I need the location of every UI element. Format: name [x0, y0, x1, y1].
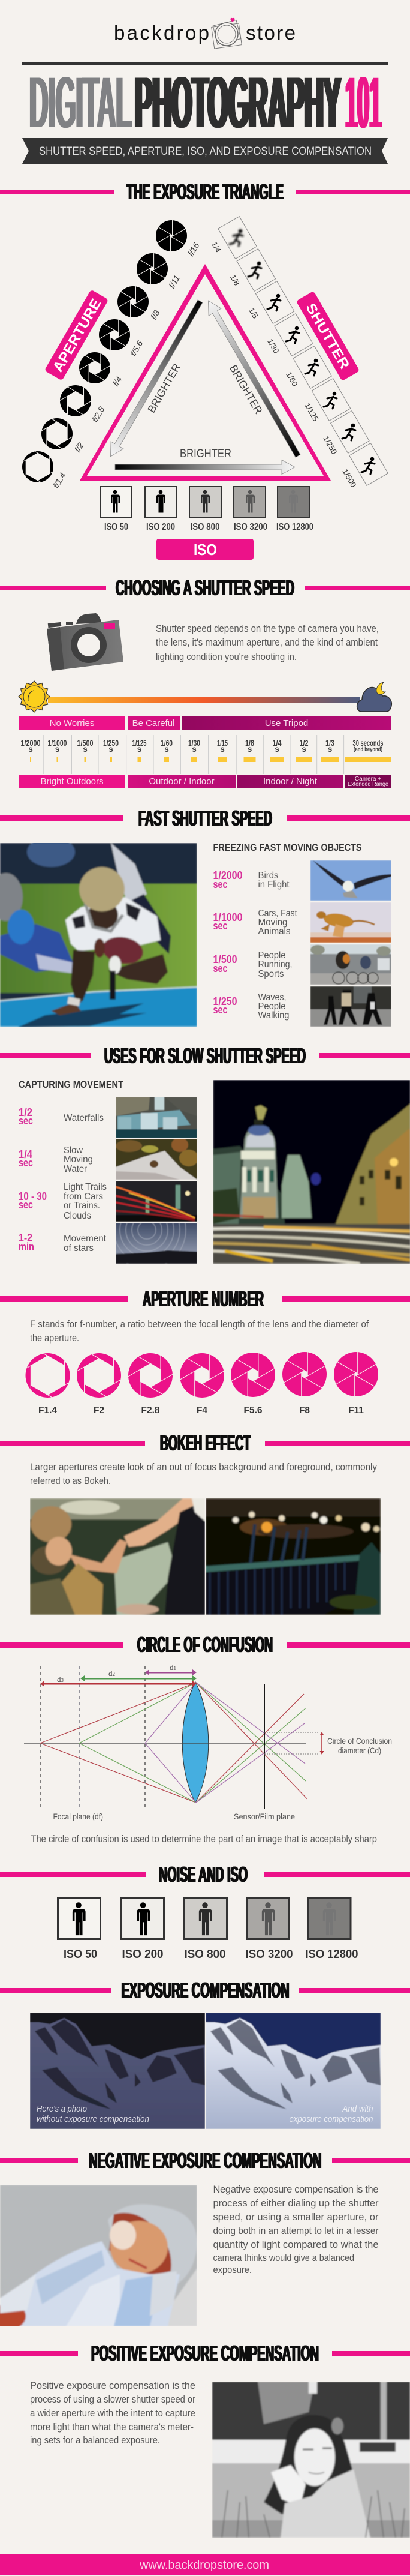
logo word: backdrop: backdrop [114, 22, 209, 44]
row: 1/2000 birds: sec [213, 878, 228, 890]
text: negative exposure compensation: Negative exposure compensation is the [213, 2184, 379, 2195]
aperture value labels: f/1.4 [51, 471, 68, 490]
exposure duration bars [30, 757, 391, 762]
large iso labels: ISO 200 [122, 1948, 163, 1961]
capturing movement panel [19, 1079, 198, 1269]
triangle outline [80, 264, 331, 481]
band: use tripod: Use Tripod [265, 718, 308, 728]
heading: noise and iso: NOISE AND ISO [159, 1862, 248, 1887]
text: shutter speed intro [156, 623, 379, 662]
text: negative exposure compensation: quantity of light compared to what the [213, 2239, 379, 2250]
large iso labels [64, 1948, 358, 1961]
row: waterfalls: Waterfalls [64, 1113, 104, 1123]
text: f-number definition [30, 1319, 369, 1344]
icon: moon and cloud [357, 682, 391, 712]
f-number labels: F5.6 [243, 1405, 263, 1416]
sensor plane [264, 1684, 265, 1809]
shutter value labels: 1/250 [321, 434, 339, 456]
pill: shutter [296, 291, 360, 381]
row: 1/2000 birds: 1/2000 [213, 869, 242, 881]
shutter value labels: 1/5 [247, 306, 260, 320]
shutter speed values: s [55, 745, 59, 754]
text: shutter speed intro: lighting condition you're shooting in. [156, 651, 297, 662]
photo: child holding hand [30, 1498, 205, 1615]
row: light trails: from Cars [64, 1192, 103, 1202]
iso scale [100, 487, 313, 560]
arrow: d2 [80, 1675, 197, 1681]
shutter speed values: 1/60 [161, 739, 173, 748]
arrow: aperture brighter [104, 298, 206, 460]
text: bokeh definition: referred to as Bokeh. [30, 1476, 111, 1486]
shutter speed values: s [248, 745, 252, 754]
shutter speed values: s [164, 745, 169, 754]
photo: city night street with light trails [213, 1080, 410, 1264]
icon: aperture F5.6 [231, 1353, 275, 1397]
shutter value labels: 1/8 [228, 273, 242, 287]
row: movement of stars: min [19, 1241, 34, 1253]
row: 1/1000 cars animals: Cars, Fast [258, 908, 297, 919]
caption: with compensation: exposure compensation [289, 2114, 373, 2124]
photo: star trails [116, 1223, 197, 1264]
aperture scale [22, 220, 201, 490]
row: 1/1000 cars animals: Moving [258, 917, 288, 928]
arrow: shutter brighter [202, 297, 304, 460]
row: 1/250 waves walking: Walking [258, 1010, 289, 1021]
aperture value labels: f/2.8 [90, 405, 107, 424]
shutter speed values: s [220, 745, 225, 754]
heading: aperture number: APERTURE NUMBER [143, 1286, 264, 1311]
row: 1/500 people running [213, 950, 293, 979]
row: movement of stars [19, 1232, 107, 1253]
row: 1/500 people running: People [258, 950, 286, 961]
shutter speed values: s [275, 745, 279, 754]
optical axis [24, 1743, 306, 1744]
shutter speed values: 1/2000 [20, 739, 41, 748]
label: circle of conclusion diameter: Circle of Conclusion [327, 1736, 392, 1746]
heading: noise and iso [0, 1862, 410, 1887]
arrow: d3 [40, 1681, 197, 1687]
aperture value labels: f/16 [186, 241, 201, 258]
band: outdoor indoor: Outdoor / Indoor [149, 776, 215, 787]
shutter speed values: s [137, 745, 141, 754]
subheading: FREEZING FAST MOVING OBJECTS [213, 842, 362, 853]
heading: fast shutter speed [0, 806, 410, 830]
photo: cheetah [310, 902, 391, 943]
heading: aperture number [0, 1286, 410, 1311]
large iso labels: ISO 12800 [306, 1948, 358, 1961]
subtitle ribbon [22, 138, 388, 164]
text: f-number definition: F stands for f-number, a ratio between the focal length of the lens and the diameter of [30, 1319, 369, 1330]
heading: the exposure triangle [0, 179, 410, 204]
aperture number scale [25, 1352, 378, 1416]
pill: aperture [44, 289, 108, 381]
aperture value labels: f/8 [149, 308, 162, 321]
row: 1/1000 cars animals: Animals [258, 926, 290, 937]
label: brighter bottom: BRIGHTER [180, 448, 231, 460]
row: 1/2000 birds: Birds [258, 871, 278, 881]
shutter speed values: 1/250 [103, 739, 119, 748]
icon: aperture f/1.4 [22, 451, 53, 482]
footer [0, 2554, 410, 2575]
icon: aperture f/11 [137, 253, 168, 284]
red rays [40, 1683, 307, 1803]
shutter value labels: 1/60 [284, 370, 300, 388]
heading: fast shutter speed: FAST SHUTTER SPEED [138, 806, 272, 830]
band: no worries [19, 716, 125, 730]
heading: bokeh effect [0, 1431, 410, 1455]
label: brighter right: BRIGHTER [227, 363, 265, 416]
label: focal plane: Focal plane (df) [53, 1812, 103, 1821]
text: positive exposure compensation: ing sets for a balanced exposure. [30, 2435, 160, 2446]
row: waterfalls: sec [19, 1115, 33, 1127]
f-number labels: F2 [94, 1405, 104, 1416]
band: camera extended range [345, 775, 391, 788]
photo: bokeh fence [206, 1498, 381, 1615]
icon: aperture f/2.8 [60, 385, 91, 416]
shutter speed values: s [302, 745, 306, 754]
band: bright outdoors [19, 775, 125, 788]
icon: aperture f/16 [156, 220, 187, 251]
icon: aperture F4 [180, 1353, 224, 1398]
row: 1/1000 cars animals: 1/1000 [213, 911, 242, 923]
large iso figures [73, 1902, 336, 1935]
shutter speed values: 1/30 [188, 739, 200, 748]
caption: without compensation: Here's a photo [37, 2104, 87, 2114]
iso value labels: ISO 50 [104, 522, 128, 532]
distance labels: d1 [170, 1663, 176, 1672]
shutter speed values: 1/500 [77, 739, 94, 748]
iso value labels [104, 522, 313, 532]
shutter value labels: 1/4 [210, 240, 223, 254]
iso value labels: ISO 800 [191, 522, 219, 532]
subheading: CAPTURING MOVEMENT [19, 1079, 123, 1090]
row: 1/2000 birds [213, 869, 290, 890]
large iso labels: ISO 50 [64, 1948, 97, 1961]
shutter speed values: 30 seconds [352, 739, 384, 748]
row: slow moving water [19, 1145, 93, 1174]
shutter speed values: 1/4 [272, 739, 282, 748]
arrow: iso brighter [115, 460, 295, 474]
large iso labels: ISO 800 [185, 1948, 225, 1961]
main title: DIGITAL [29, 61, 132, 145]
row: 1/250 waves walking: Waves, [258, 992, 287, 1003]
icon: aperture f/2 [41, 418, 73, 449]
caption: with compensation: And with [342, 2104, 373, 2114]
shutter value labels: 1/125 [303, 401, 321, 423]
icon: aperture F1.4 [25, 1353, 70, 1398]
icon: logo camera with heart [212, 18, 242, 49]
photo: waterfall [116, 1097, 197, 1138]
band: no worries: No Worries [50, 718, 94, 728]
film frames with runner [218, 217, 388, 485]
top rule [22, 62, 388, 65]
shutter speed values: 1/3 [325, 739, 334, 748]
row: light trails: Light Trails [64, 1182, 107, 1192]
footer: www.backdropstore.com [139, 2559, 269, 2572]
lens [182, 1682, 209, 1803]
icon: camera [47, 613, 123, 671]
shutter value labels: 1/500 [340, 467, 358, 489]
shutter speed values: 1/2 [300, 739, 308, 748]
heading: the exposure triangle: THE EXPOSURE TRIANGLE [126, 179, 284, 204]
f-number labels: F4 [197, 1405, 207, 1416]
focal plane markers [40, 1666, 145, 1809]
band: outdoor indoor [128, 775, 236, 788]
label: brighter left: BRIGHTER [145, 362, 183, 415]
text: positive exposure compensation [30, 2380, 195, 2446]
shutter scale [210, 217, 388, 489]
f-number labels: F11 [348, 1405, 364, 1416]
pill: aperture: APERTURE [50, 296, 104, 375]
shutter speed values: 1/1000 [48, 739, 67, 748]
text: shutter speed intro: the lens, it's maximum aperture, and the kind of ambient [156, 637, 378, 648]
row: slow moving water: Water [64, 1164, 88, 1174]
text: negative exposure compensation: camera thinks would give a balanced [213, 2253, 354, 2263]
icon: aperture F11 [334, 1352, 378, 1396]
aperture value labels: f/4 [111, 375, 124, 388]
shutter speed values: s [108, 745, 113, 754]
row: 1/250 waves walking: People [258, 1001, 286, 1012]
iso value labels: ISO 200 [146, 522, 175, 532]
row: slow moving water: 1/4 [19, 1148, 32, 1160]
shutter speed values: (and beyond) [354, 746, 382, 753]
label: sensor film plane: Sensor/Film plane [234, 1812, 295, 1821]
text: negative exposure compensation: exposure. [213, 2265, 252, 2275]
row: light trails: or Trains. [64, 1201, 100, 1211]
label: circle of conclusion diameter: diameter (Cd) [338, 1746, 381, 1755]
pill: iso: ISO [194, 541, 217, 559]
caption: without compensation: without exposure compensation [37, 2114, 149, 2124]
photo: cyclists [310, 944, 391, 985]
band: indoor night [237, 775, 343, 788]
shutter value labels [210, 240, 358, 489]
icon: aperture F8 [282, 1352, 327, 1396]
aperture value labels: f/11 [167, 274, 182, 290]
text: bokeh definition [30, 1462, 378, 1486]
text: bokeh definition: Larger apertures create look of an out of focus background and foreground, commonly [30, 1462, 378, 1473]
row: slow moving water: Moving [64, 1154, 93, 1165]
aperture value labels: f/5.6 [128, 339, 145, 358]
shutter speed values [20, 739, 384, 754]
noise and iso samples [58, 1899, 358, 1961]
photo: people walking [310, 986, 391, 1027]
row: movement of stars: of stars [64, 1243, 94, 1253]
aperture value labels [51, 241, 201, 490]
heading: bokeh effect: BOKEH EFFECT [160, 1431, 251, 1455]
row: 1/500 people running: 1/500 [213, 953, 237, 965]
photo: mountain with compensation [206, 2013, 381, 2129]
text: positive exposure compensation: Positive exposure compensation is the [30, 2380, 195, 2391]
row: movement of stars: 1-2 [19, 1232, 32, 1244]
row: 1/2000 birds: in Flight [258, 880, 290, 890]
caption: with compensation [289, 2104, 373, 2124]
row: 1/500 people running: sec [213, 962, 228, 974]
pill: shutter: SHUTTER [303, 301, 353, 372]
shutter speed values: 1/8 [245, 739, 254, 748]
row: light trails [19, 1182, 107, 1221]
text: positive exposure compensation: more light than what the camera's meter- [30, 2422, 194, 2433]
band: use tripod [182, 716, 391, 730]
text: shutter speed intro: Shutter speed depends on the type of camera you have, [156, 623, 379, 634]
text: positive exposure compensation: a wider aperture with the intent to capture [30, 2408, 195, 2419]
row: light trails: Clouds [64, 1211, 91, 1221]
text: negative exposure compensation: speed, or using a smaller aperture, or [213, 2212, 379, 2223]
text: negative exposure compensation [213, 2184, 379, 2275]
circle of confusion diagram [24, 1663, 392, 1821]
freezing fast moving objects panel [213, 842, 391, 1027]
iso sample boxes [100, 487, 309, 517]
green rays [79, 1683, 306, 1803]
band: indoor night: Indoor / Night [263, 776, 318, 787]
f-number labels: F1.4 [38, 1405, 57, 1416]
header logo [114, 18, 296, 49]
row: light trails: sec [19, 1199, 33, 1211]
band: bright outdoors: Bright Outdoors [40, 776, 104, 787]
logo word: store: store [246, 22, 296, 44]
text: negative exposure compensation: process of either dialing up the shutter [213, 2198, 379, 2209]
shutter speed values: s [328, 745, 332, 754]
exposure triangle diagram [80, 264, 331, 481]
circle of confusion marker [264, 1732, 324, 1755]
heading: circle of confusion [0, 1632, 410, 1657]
label: circle of conclusion diameter [327, 1736, 392, 1755]
shutter speed values: 1/125 [132, 739, 147, 748]
row: 1/500 people running: Running, [258, 959, 293, 970]
shutter speed light scale [19, 681, 391, 788]
band: camera extended range: Extended Range [348, 781, 388, 788]
f-number labels: F8 [299, 1405, 310, 1416]
photo: slow water [116, 1138, 198, 1180]
row: waterfalls: 1/2 [19, 1106, 32, 1118]
icon: aperture f/4 [79, 352, 110, 383]
row: light trails: 10 - 30 [19, 1190, 47, 1202]
photo: sleeping baby [0, 2185, 197, 2329]
text: f-number definition: the aperture. [30, 1333, 79, 1344]
f-number labels [38, 1405, 364, 1416]
icon: sun [19, 681, 50, 712]
photo: football player diving [0, 837, 197, 1027]
shutter speed values: s [192, 745, 197, 754]
arrow: d1 [145, 1669, 197, 1675]
row: 1/250 waves walking: sec [213, 1004, 228, 1016]
photo: light trails [116, 1181, 197, 1222]
row: slow moving water: sec [19, 1157, 33, 1169]
icon: aperture f/5.6 [99, 319, 130, 350]
band: be careful: Be Careful [132, 718, 174, 728]
row: 1/1000 cars animals [213, 908, 297, 937]
photo: mountain without compensation [30, 2013, 205, 2129]
row: 1/1000 cars animals: sec [213, 920, 228, 932]
aperture value labels: f/2 [73, 441, 86, 454]
icon: aperture F2.8 [128, 1353, 173, 1398]
shutter value labels: 1/30 [266, 337, 281, 355]
row: movement of stars: Movement [64, 1234, 107, 1244]
photo: woman in grass [212, 2382, 410, 2538]
band: be careful [128, 716, 180, 730]
row: slow moving water: Slow [64, 1145, 83, 1156]
row: 1/500 people running: Sports [258, 969, 284, 979]
iso figures [111, 490, 298, 512]
distance labels: d3 [57, 1675, 64, 1684]
icon: aperture F2 [77, 1353, 121, 1398]
caption: without compensation [37, 2104, 149, 2124]
purple rays [145, 1683, 305, 1803]
shutter speed values: s [28, 745, 33, 754]
row: 1/250 waves walking: 1/250 [213, 995, 237, 1007]
photo: bird [310, 860, 391, 901]
icon: aperture f/8 [117, 286, 149, 317]
shutter speed values: 1/15 [217, 739, 228, 748]
large iso labels: ISO 3200 [246, 1948, 293, 1961]
f-number labels: F2.8 [141, 1405, 160, 1416]
distance labels: d2 [108, 1669, 115, 1678]
row: 1/250 waves walking [213, 992, 289, 1021]
text: negative exposure compensation: doing both in an attempt to let in a lesser [213, 2226, 379, 2236]
pill: iso [156, 539, 254, 560]
band: camera extended range: Camera + [355, 776, 381, 782]
row: waterfalls [19, 1106, 104, 1127]
iso value labels: ISO 12800 [276, 522, 313, 532]
distance labels [57, 1663, 176, 1684]
text: positive exposure compensation: process of using a slower shutter speed or [30, 2394, 195, 2405]
iso value labels: ISO 3200 [234, 522, 267, 532]
large iso boxes [58, 1899, 351, 1939]
heading: circle of confusion: CIRCLE OF CONFUSION [137, 1632, 273, 1657]
shutter speed values: s [83, 745, 88, 754]
gradient bar [48, 697, 360, 703]
